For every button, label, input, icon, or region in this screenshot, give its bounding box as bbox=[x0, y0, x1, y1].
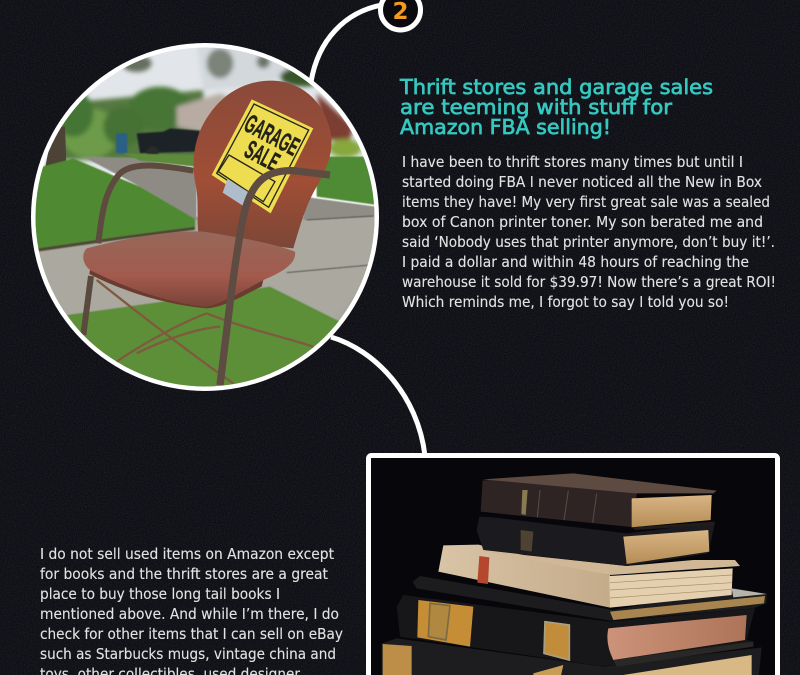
rusty legs bbox=[97, 280, 313, 383]
text block: used books and eBay items: I do not sell used items on Amazon except bbox=[40, 545, 334, 563]
left armrest bbox=[98, 165, 193, 243]
sign: SALE bbox=[240, 135, 284, 177]
heading: are teeming with stuff for bbox=[400, 95, 673, 119]
far concrete bbox=[303, 197, 374, 220]
heading: Thrift stores and garage sales bbox=[399, 75, 713, 99]
text block: used books and eBay items bbox=[40, 545, 343, 675]
rear left leg bbox=[83, 276, 91, 335]
second from top book bbox=[477, 517, 715, 566]
background scenery bbox=[53, 43, 362, 160]
text block: thrift store story: started doing FBA I never noticed all the New in Box bbox=[402, 173, 762, 191]
right armrest and leg bbox=[220, 171, 330, 385]
grass left bbox=[30, 158, 195, 248]
text block: thrift store story: I paid a dollar and within 48 hours of reaching the bbox=[402, 253, 749, 271]
connector line: photo to books panel bbox=[331, 337, 425, 456]
circular photo: garage sale chair bbox=[30, 40, 380, 400]
foreground grass bbox=[66, 286, 339, 386]
cream book bbox=[438, 545, 610, 608]
heading: Amazon FBA selling! bbox=[400, 115, 611, 139]
thin dark book bbox=[413, 576, 767, 621]
text block: thrift store story: items they have! My very first great sale was a sealed bbox=[402, 193, 770, 211]
text block: used books and eBay items: place to buy those long tail books I bbox=[40, 585, 280, 603]
text block: used books and eBay items: such as Starbucks mugs, vintage china and bbox=[40, 645, 336, 663]
text block: used books and eBay items: for books and the thrift stores are a great bbox=[40, 565, 328, 583]
text block: thrift store story: Which reminds me, I forgot to say I told you so! bbox=[402, 293, 729, 311]
text block: thrift store story: I have been to thrift stores many times but until I bbox=[402, 153, 743, 171]
seat bbox=[83, 231, 295, 307]
text block: used books and eBay items: check for other items that I can sell on eBay bbox=[40, 625, 343, 643]
truck bbox=[116, 128, 200, 158]
text block: thrift store story: box of Canon printer toner. My son berated me and bbox=[402, 213, 763, 231]
near concrete bbox=[30, 217, 377, 320]
text block: thrift store story bbox=[402, 153, 776, 311]
bottom book bbox=[382, 638, 762, 675]
base ground bbox=[36, 216, 374, 386]
grass right bbox=[317, 157, 377, 205]
sign bbox=[212, 99, 313, 213]
chair back bbox=[194, 81, 331, 248]
step number badge bbox=[380, 0, 420, 30]
sky bbox=[43, 48, 364, 174]
connector line: badge to photo bbox=[311, 5, 382, 82]
heading bbox=[399, 75, 713, 139]
text block: thrift store story: said ‘Nobody uses that printer anymore, don’t buy it!’. bbox=[402, 233, 775, 251]
sign: GARAGE bbox=[239, 109, 304, 162]
large black book with pink pages bbox=[397, 595, 755, 666]
photo panel: stack of old books bbox=[368, 456, 778, 675]
sidewalk path bbox=[83, 157, 197, 220]
top book bbox=[480, 480, 636, 527]
text block: used books and eBay items: mentioned above. And while I’m there, I do bbox=[40, 605, 339, 623]
